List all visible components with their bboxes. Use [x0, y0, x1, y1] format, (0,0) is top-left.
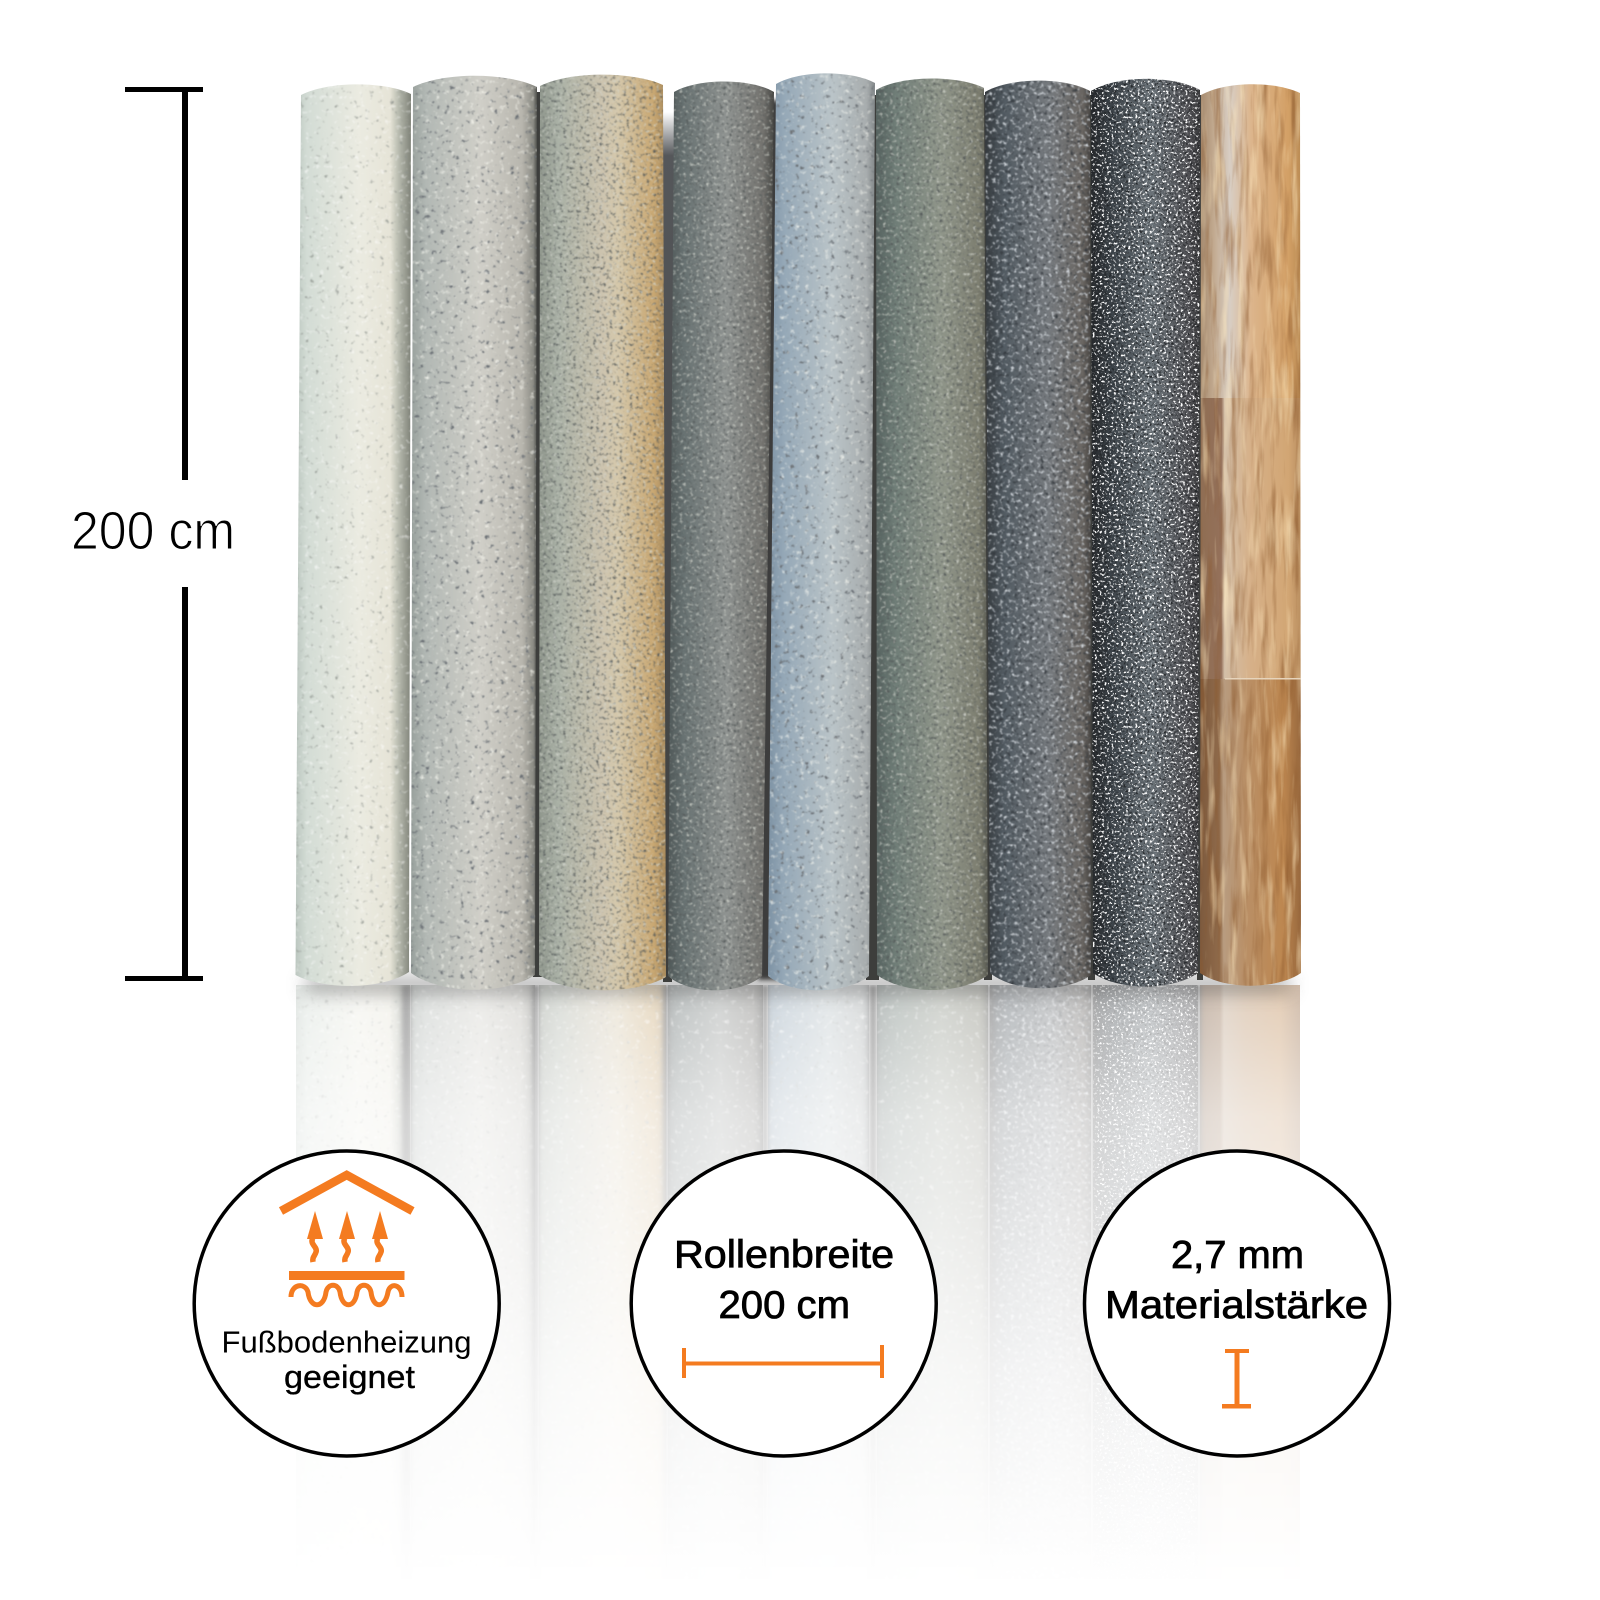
shadow gaps between rolls	[533, 92, 1203, 982]
badge: roll width	[631, 1151, 936, 1456]
badge: material thickness	[1084, 1151, 1390, 1456]
contact shadow under the rolls	[305, 978, 1290, 992]
roll 1: light cream speckled	[296, 84, 411, 986]
label: Fußbodenheizung geeignet: Fußbodenheizung	[222, 1324, 472, 1360]
label: Rollenbreite 200 cm: 200 cm	[718, 1284, 850, 1327]
badge: floor heating	[194, 1151, 499, 1456]
label: Fußbodenheizung geeignet: geeignet	[284, 1359, 415, 1395]
label: 2,7 mm Materialstärke	[1105, 1234, 1368, 1327]
infographic canvas	[74, 73, 1392, 1473]
height dimension: 200 cm	[71, 87, 235, 981]
roll 2: light grey speckled	[411, 76, 537, 990]
reflection of the rolls on the floor	[296, 985, 1300, 1473]
roll 5: light blue speckled	[768, 73, 875, 990]
roll 8: dark glitter speckled	[1091, 79, 1200, 987]
label: Fußbodenheizung geeignet	[222, 1324, 472, 1395]
icon: width bar	[682, 1345, 884, 1378]
roll 7: anthracite speckled	[985, 81, 1091, 988]
label: 2,7 mm Materialstärke: Materialstärke	[1105, 1284, 1368, 1327]
label: Rollenbreite 200 cm	[674, 1234, 894, 1327]
roll 6: grey-green speckled	[876, 78, 988, 990]
roll 9: wood pattern	[1198, 78, 1304, 994]
roll 4: dark grey-blue speckled	[668, 82, 774, 990]
icon: house with rising heat and floor heating pipe	[281, 1175, 412, 1305]
label: Rollenbreite 200 cm: Rollenbreite	[674, 1234, 894, 1276]
height dimension: 200 cm: 200 cm	[71, 501, 235, 561]
label: 2,7 mm Materialstärke: 2,7 mm	[1171, 1234, 1304, 1277]
roll 3: beige sand speckled	[539, 75, 666, 990]
icon: thickness bar	[1222, 1349, 1251, 1408]
